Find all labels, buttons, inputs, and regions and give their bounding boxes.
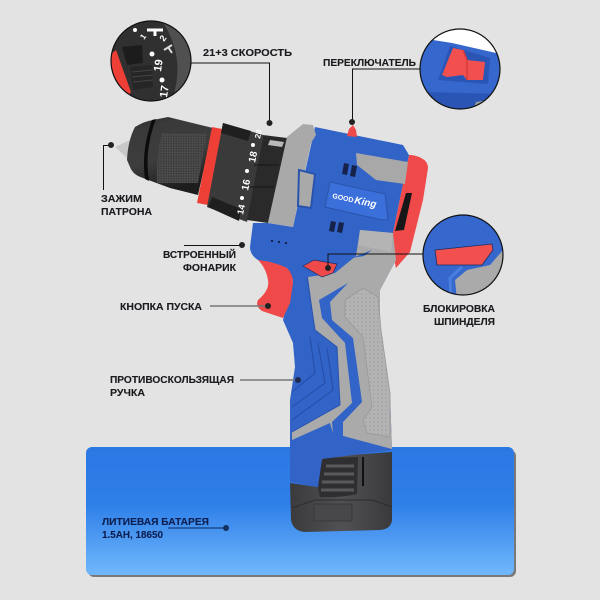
callout: chuck: ПАТРОНА — [101, 207, 152, 218]
drill bit — [115, 139, 136, 158]
logo plate — [325, 182, 388, 220]
LED dots — [271, 240, 287, 244]
callout: battery — [102, 517, 229, 541]
battery — [290, 452, 392, 532]
spindle lock button — [303, 260, 337, 277]
callout: chuck: ЗАЖИМ — [101, 194, 142, 205]
callout: spindle lock — [325, 254, 495, 328]
callout: 21+3 speed: 21+3 СКОРОСТЬ — [203, 48, 292, 59]
callout: battery: ЛИТИЕВАЯ БАТАРЕЯ — [102, 517, 209, 528]
logo plate: King — [353, 195, 377, 211]
speed collar: 20 — [253, 128, 264, 139]
switch tab — [347, 125, 357, 137]
grip blue channel — [319, 283, 362, 437]
grey gear band — [268, 124, 316, 227]
drill illustration — [115, 117, 428, 532]
inset: mode switch — [418, 28, 505, 112]
speed collar: 16 — [240, 178, 253, 192]
side window — [298, 170, 315, 208]
callout: trigger — [120, 302, 271, 313]
trigger — [257, 260, 293, 318]
callout: built-in light: ВСТРОЕННЫЙ — [163, 248, 236, 261]
callout: grip: РУЧКА — [110, 388, 145, 399]
callout: battery: 1.5АН, 18650 — [102, 530, 163, 541]
logo plate: GOOD — [332, 193, 354, 204]
callout: built-in light — [163, 242, 245, 274]
callout: grip — [110, 375, 301, 399]
grey grip — [292, 230, 396, 449]
callout: chuck — [101, 142, 152, 218]
speed collar: 18 — [247, 150, 260, 164]
speed collar: 14 — [235, 204, 247, 215]
speed collar — [207, 123, 287, 223]
callout: switch: ПЕРЕКЛЮЧАТЕЛЬ — [323, 58, 416, 69]
callout: 21+3 speed — [191, 48, 292, 126]
callout: switch — [323, 58, 420, 125]
inset: spindle lock — [422, 214, 504, 296]
callout: built-in light: ФОНАРИК — [183, 263, 237, 274]
grey top pad — [356, 153, 408, 184]
red rear cap — [392, 155, 428, 268]
callout: trigger: КНОПКА ПУСКА — [120, 302, 202, 313]
red ring — [197, 127, 222, 205]
panel: blue battery backdrop — [86, 447, 516, 577]
inset: speed dial: 17 — [158, 85, 172, 98]
inset: speed dial: 2 — [157, 33, 169, 43]
blue motor housing — [250, 127, 409, 487]
chuck — [127, 117, 213, 195]
callout: spindle lock: БЛОКИРОВКА — [423, 304, 495, 315]
callout: grip: ПРОТИВОСКОЛЬЗЯЩАЯ — [110, 375, 234, 386]
inset: speed dial — [110, 20, 192, 102]
inset: speed dial: 1 — [138, 32, 149, 41]
callout: spindle lock: ШПИНДЕЛЯ — [434, 317, 495, 328]
vents — [329, 163, 357, 233]
grip ridges — [292, 277, 340, 432]
inset: speed dial: 19 — [152, 59, 166, 72]
